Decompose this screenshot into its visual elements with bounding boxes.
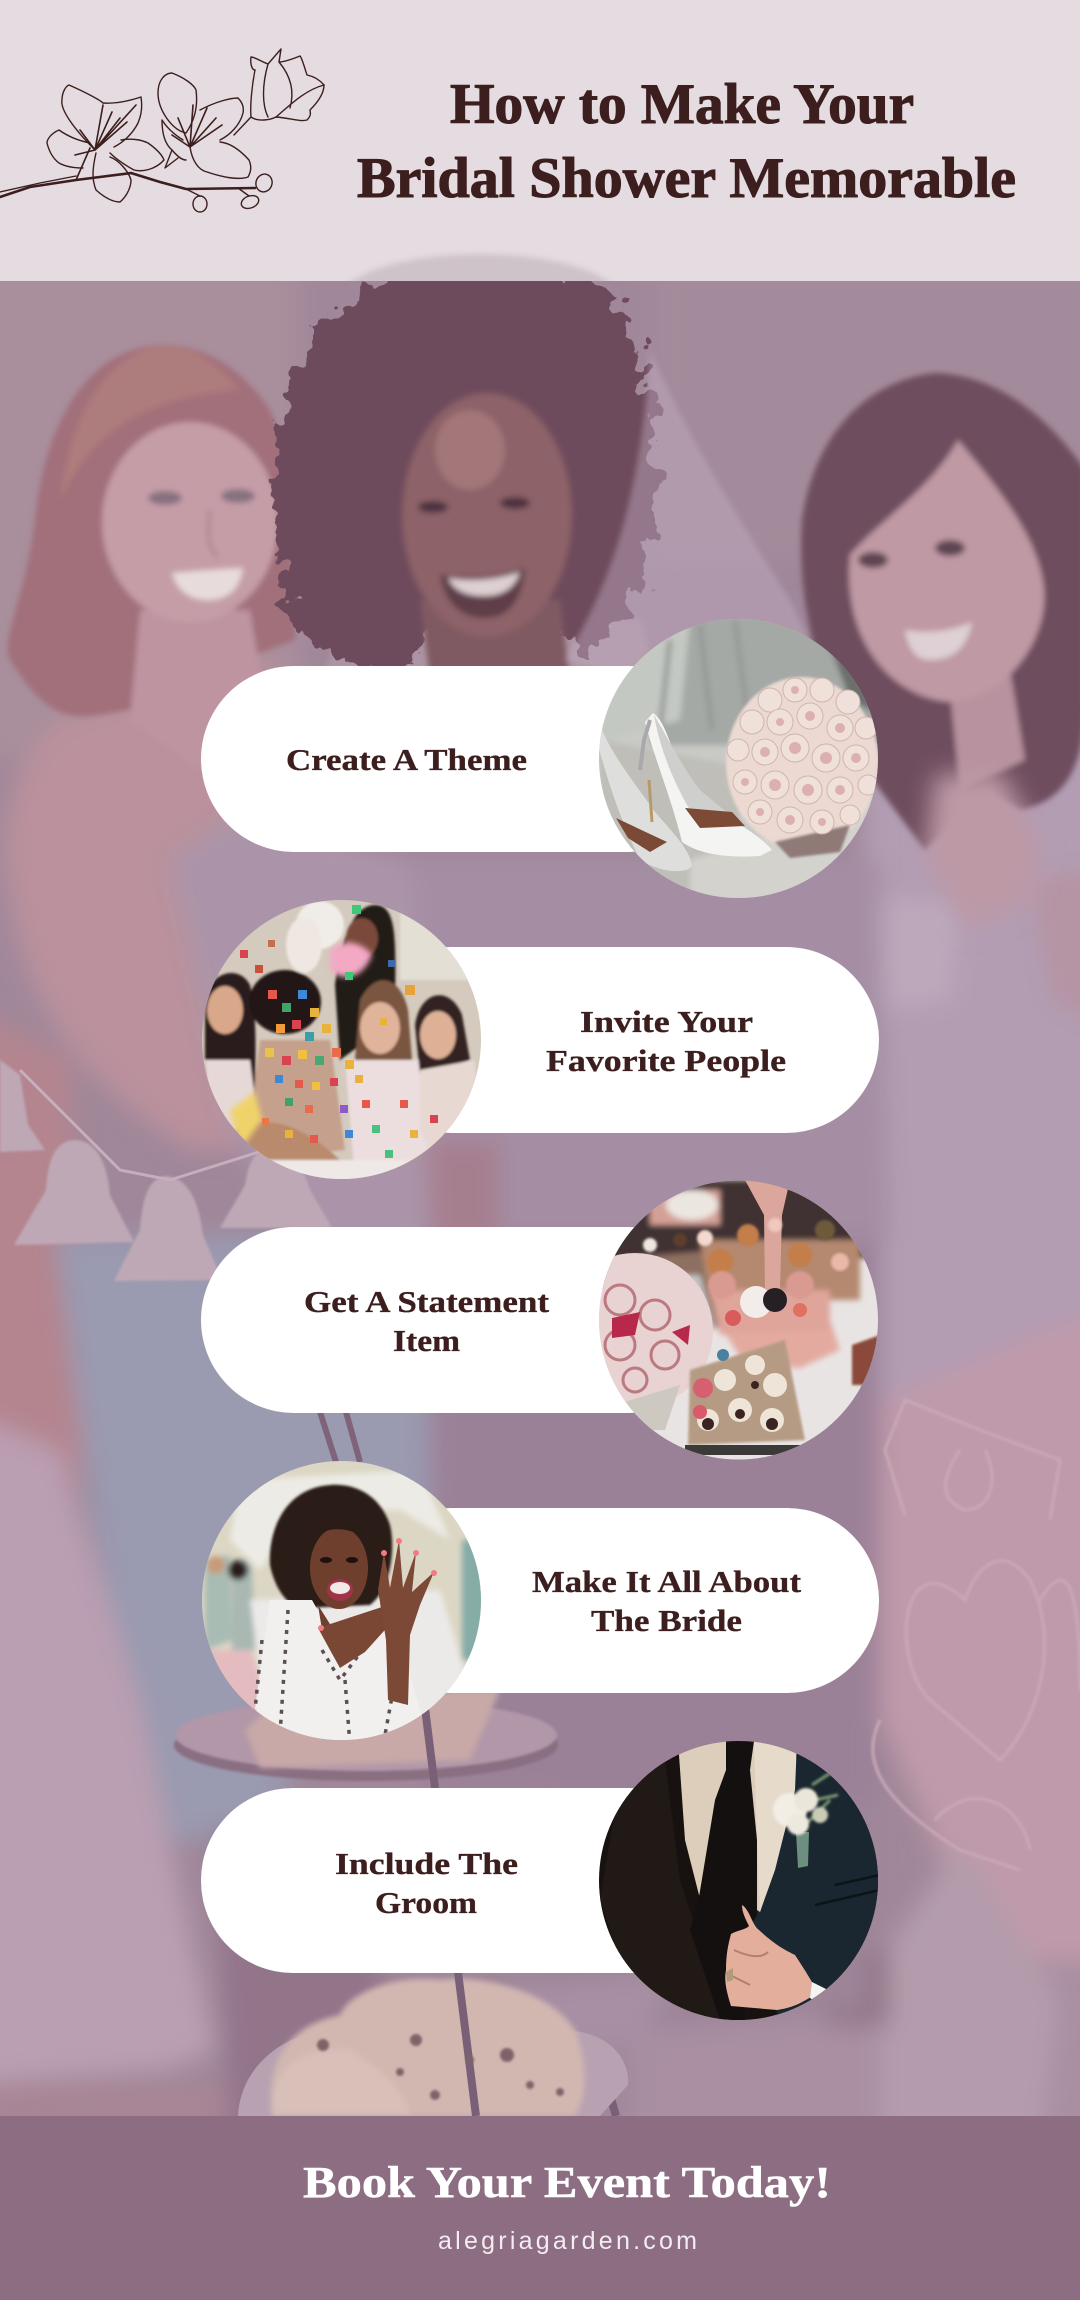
torso and arm — [0, 663, 274, 1156]
pill: Invite Your Favorite People — [359, 947, 879, 1133]
pill: Include The Groom — [201, 1788, 721, 1973]
photo: bride showing ring — [202, 1461, 487, 1745]
center dress — [400, 860, 890, 1240]
floral dress — [170, 810, 430, 1235]
pill: Create A Theme — [201, 666, 721, 852]
footer band — [0, 2116, 1080, 2300]
label: Item — [393, 1323, 460, 1358]
label — [304, 1284, 550, 1358]
left side skin — [0, 1019, 86, 1470]
blue skirt — [55, 1235, 430, 1840]
faint hair behind header — [351, 252, 609, 281]
icon: line-drawn blossom branch — [0, 49, 324, 212]
left woman: hair, face, features — [6, 343, 297, 718]
cookies — [880, 1300, 1080, 1990]
step 2: pill and photo — [202, 900, 879, 1185]
title: How to Make Your — [450, 73, 914, 136]
pill: Get A Statement Item — [201, 1227, 721, 1413]
label — [532, 1564, 802, 1638]
label — [546, 1004, 786, 1078]
step 5: pill and photo — [201, 1741, 880, 2021]
label — [335, 1846, 518, 1920]
cake stand — [174, 1412, 628, 2116]
paper bells garland — [0, 1060, 332, 1281]
label: Include The — [335, 1846, 518, 1881]
step 1: pill and photo — [201, 615, 890, 900]
step 3: pill and photo — [201, 1180, 880, 1460]
website: alegriagarden.com — [438, 2227, 697, 2255]
photo: dessert table — [599, 1180, 878, 1460]
right woman: hair, face, features, hand — [801, 373, 1080, 850]
photo: shoes and bouquet — [598, 615, 890, 900]
right woman dress — [860, 730, 1080, 1400]
photo: groom in suit with boutonniere — [599, 1741, 880, 2021]
label: Groom — [375, 1885, 477, 1920]
center woman: curly hair, neck, face, features, veil — [274, 258, 660, 690]
label: Invite Your — [580, 1004, 753, 1039]
call to action: Book Your Event Today! — [303, 2158, 831, 2207]
label: Create A Theme — [286, 742, 527, 777]
label: The Bride — [591, 1603, 742, 1638]
label: Make It All About — [532, 1564, 802, 1599]
step 4: pill and photo — [202, 1461, 879, 1745]
cookie outlines — [873, 1400, 1080, 1870]
header band — [0, 0, 1080, 281]
photo: friends blowing confetti — [202, 900, 490, 1185]
pink/white dress — [0, 1410, 215, 2085]
label: Get A Statement — [304, 1284, 550, 1319]
title: Bridal Shower Memorable — [357, 147, 1016, 210]
label: Favorite People — [546, 1043, 786, 1078]
pill: Make It All About The Bride — [359, 1508, 879, 1693]
title — [357, 73, 1016, 210]
